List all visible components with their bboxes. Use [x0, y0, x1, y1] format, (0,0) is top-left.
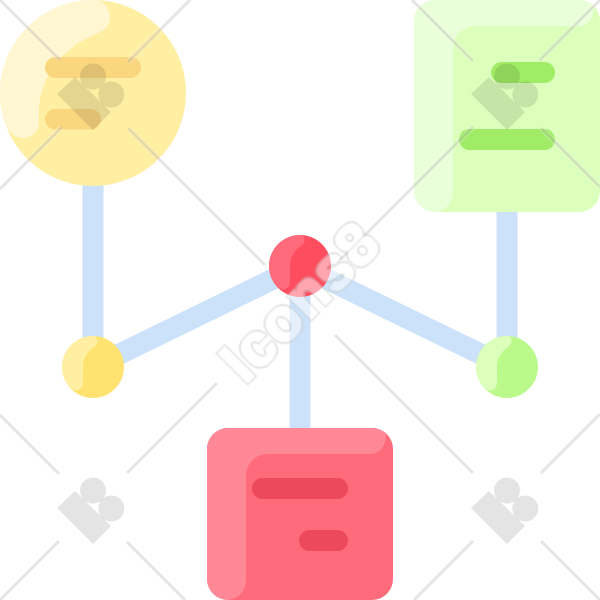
watermark logo: bottom right — [471, 478, 538, 544]
watermark logo: bottom left — [57, 478, 124, 544]
hub: red dot — [267, 234, 331, 297]
node: yellow circle card — [0, 0, 186, 186]
node: green card — [414, 0, 600, 212]
node: red card — [207, 428, 393, 600]
watermark logo: top left — [57, 64, 124, 130]
yellow card bars — [45, 57, 141, 130]
watermark text: Icons8: Icons8 — [208, 209, 393, 394]
watermark logo: top right — [471, 64, 538, 130]
connector lines — [93, 180, 507, 435]
node: green dot — [474, 335, 538, 398]
red card bars — [252, 478, 348, 551]
node: yellow dot — [60, 335, 124, 398]
green card bars — [459, 62, 555, 150]
